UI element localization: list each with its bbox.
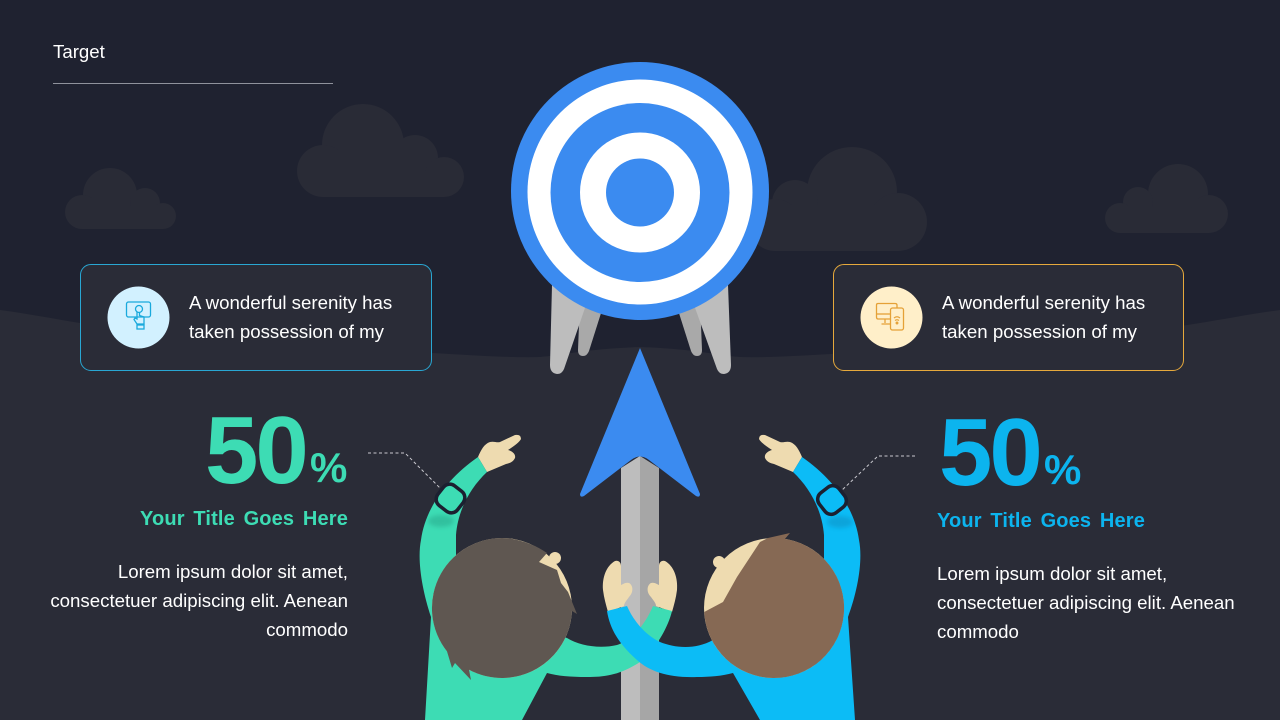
arrow head: [580, 348, 700, 497]
pointing hand left: [478, 435, 521, 472]
text: right body: consectetuer adipiscing elit. Aenean: [937, 592, 1235, 613]
label: Target: Target: [53, 41, 105, 62]
icon: devices wifi: [860, 286, 922, 348]
text: right body: [937, 563, 1235, 642]
body and arms green: [420, 457, 672, 720]
number: 50: [939, 399, 1040, 506]
text: right body: commodo: [937, 621, 1019, 642]
heading: right title: Your Title Goes Here: [937, 510, 1145, 532]
text: right body: Lorem ipsum dolor sit amet,: [937, 563, 1167, 584]
person left: [420, 435, 677, 720]
watch right: [814, 482, 850, 518]
connector line right: [840, 456, 915, 492]
heading: left title: Your Title Goes Here: [140, 508, 348, 530]
watch shadow right: [827, 516, 853, 528]
percent sign: %: [310, 444, 347, 491]
holding hand right: [603, 561, 632, 612]
text: left card copy: [189, 292, 392, 342]
stat: right 50%: [939, 399, 1081, 506]
cloud: far left small: [65, 168, 176, 229]
hair left: [432, 538, 577, 680]
holding hand left: [648, 561, 677, 612]
text: left body: [50, 561, 348, 640]
target bullseye: [511, 62, 769, 320]
ground hill: [0, 310, 1280, 720]
text: right card copy: A wonderful serenity has: [942, 292, 1145, 313]
head skin left: [432, 538, 572, 678]
hair right: [704, 533, 844, 678]
text: left body: consectetuer adipiscing elit. Aenean: [50, 590, 348, 611]
text: left card copy: taken possession of my: [189, 321, 384, 342]
panel: left card: [80, 264, 432, 371]
target stand legs: [550, 285, 731, 374]
icon: touch screen: [108, 286, 170, 348]
watch left: [433, 481, 468, 516]
number: 50: [205, 397, 306, 504]
cloud: far right small: [1105, 164, 1228, 233]
cloud: upper left large: [297, 104, 464, 197]
head skin right: [704, 538, 844, 678]
person right: [603, 435, 860, 720]
text: right card copy: [942, 292, 1145, 342]
pointing hand right: [759, 435, 802, 472]
text: left card copy: A wonderful serenity has: [189, 292, 392, 313]
arrow shaft: [621, 456, 659, 720]
stat: left 50%: [205, 397, 347, 504]
text: right card copy: taken possession of my: [942, 321, 1137, 342]
text: left body: commodo: [266, 619, 348, 640]
percent sign: %: [1044, 446, 1081, 493]
connector line left: [368, 453, 442, 490]
panel: right card: [833, 264, 1184, 371]
text: left body: Lorem ipsum dolor sit amet,: [118, 561, 348, 582]
cloud: behind target: [749, 147, 927, 251]
body and arms blue: [607, 457, 860, 720]
watch shadow left: [428, 515, 454, 527]
header rule: [53, 83, 333, 84]
